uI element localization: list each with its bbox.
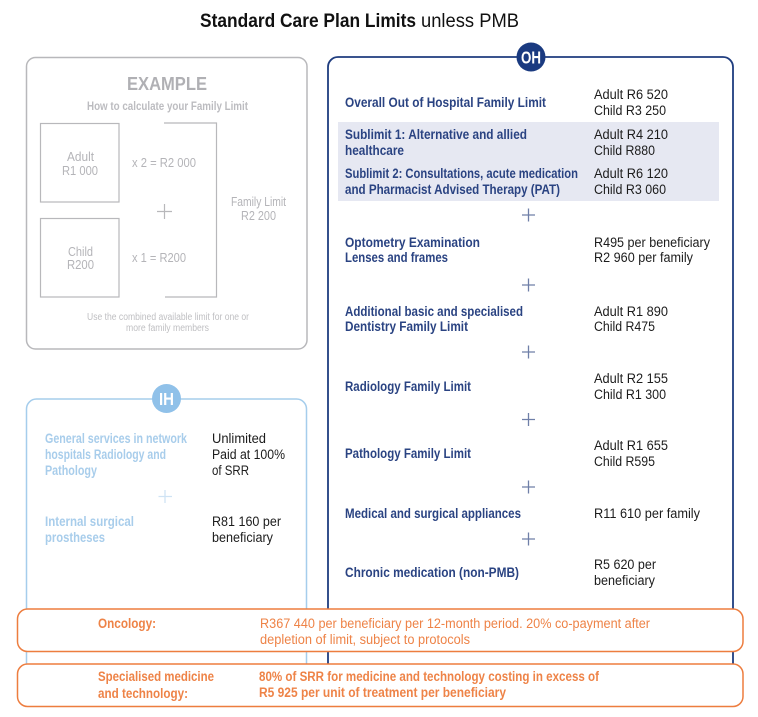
general services label [45, 431, 187, 478]
adult box: Adult [67, 150, 94, 164]
adult multiplication: x 2 = R2 000 [132, 156, 196, 170]
plus icon [522, 413, 535, 426]
panel: out of hospital [328, 42, 733, 664]
family limit result: R2 200 [241, 209, 276, 223]
row: sublimit 1: Sublimit 1: Alternative and allied [345, 127, 527, 142]
family limit result: Family Limit [231, 195, 286, 209]
callout: oncology [18, 609, 743, 652]
prostheses label: Internal surgical [45, 514, 134, 529]
example heading: EXAMPLE [127, 73, 207, 94]
panel: in hospital [26, 384, 306, 664]
panel: example [26, 58, 307, 349]
row: appliances: Medical and surgical appliances [345, 506, 521, 521]
prostheses label [45, 514, 134, 545]
general services value: Unlimited [212, 431, 266, 446]
row: dentistry: Dentistry Family Limit [345, 319, 468, 334]
row: radiology: Adult R2 155 [594, 371, 668, 386]
row: chronic medication [345, 557, 656, 588]
row: chronic medication: beneficiary [594, 573, 655, 588]
row: appliances: R11 610 per family [594, 506, 700, 521]
plus icon [522, 278, 535, 292]
bracket [164, 123, 216, 297]
row: optometry [345, 235, 710, 265]
callout: specialised medicine: and technology: [98, 686, 188, 701]
general services value [212, 431, 285, 478]
row: radiology: Radiology Family Limit [345, 379, 471, 394]
child box: R200 [67, 258, 94, 272]
row: pathology: Pathology Family Limit [345, 446, 471, 461]
title: Standard Care Plan Limits [200, 10, 416, 32]
row: pathology: Adult R1 655 [594, 438, 668, 453]
prostheses value: beneficiary [212, 530, 273, 545]
prostheses value: R81 160 per [212, 514, 281, 529]
example note: Use the combined available limit for one or [87, 312, 250, 323]
child box: Child [68, 245, 93, 259]
plus icon [157, 204, 172, 219]
row: dentistry: Adult R1 890 [594, 304, 668, 319]
general services label: hospitals Radiology and [45, 447, 166, 462]
row: chronic medication: Chronic medication (non-PMB) [345, 565, 519, 580]
row: sublimit 1: healthcare [345, 143, 404, 158]
example subheading: How to calculate your Family Limit [87, 101, 248, 113]
callout: specialised medicine [18, 664, 743, 706]
adult box [40, 124, 119, 202]
badge: OH: OH [521, 48, 541, 68]
plus icon [522, 532, 535, 546]
row: sublimit 1: Child R880 [594, 143, 655, 158]
row: optometry: R495 per beneficiary [594, 235, 710, 250]
row: sublimit 2: and Pharmacist Advised Therapy (PAT) [345, 182, 560, 197]
row: optometry: Lenses and frames [345, 250, 448, 265]
row: overall limit: Overall Out of Hospital Family Limit [345, 95, 546, 110]
row: dentistry: Additional basic and specialised [345, 304, 523, 319]
row: sublimit 2: Adult R6 120 [594, 166, 668, 181]
row: radiology [345, 371, 668, 402]
callout: specialised medicine: R5 925 per unit of treatment per beneficiary [259, 685, 506, 700]
callout: oncology: R367 440 per beneficiary per 12-month period. 20% co-payment after [260, 616, 650, 631]
row: pathology [345, 438, 668, 469]
row: optometry: Optometry Examination [345, 235, 480, 250]
general services value: of SRR [212, 463, 249, 478]
badge: OH [516, 42, 546, 72]
plus icon [522, 480, 535, 494]
row: optometry: R2 960 per family [594, 250, 693, 265]
row: overall limit: Child R3 250 [594, 103, 666, 118]
example note: more family members [126, 323, 209, 334]
example note [87, 312, 250, 334]
row: sublimit 2: Sublimit 2: Consultations, acute medication [345, 166, 578, 181]
row: sublimit 2: Child R3 060 [594, 182, 666, 197]
title: unless PMB [421, 10, 519, 32]
adult box: R1 000 [62, 164, 98, 178]
prostheses label: prostheses [45, 530, 105, 545]
plus icon [522, 208, 535, 222]
plus icon [158, 490, 172, 503]
row: pathology: Child R595 [594, 454, 655, 469]
row: dentistry: Child R475 [594, 319, 655, 334]
general services label: Pathology [45, 463, 97, 478]
sublimit shading [338, 122, 719, 201]
general services label: General services in network [45, 431, 187, 446]
row: sublimit 1: Adult R4 210 [594, 127, 668, 142]
badge: IH: IH [159, 389, 174, 409]
row: overall limit [345, 87, 668, 118]
row: appliances [345, 506, 700, 521]
child box [40, 218, 119, 297]
row: chronic medication: R5 620 per [594, 557, 656, 572]
row: radiology: Child R1 300 [594, 387, 666, 402]
family limit result [231, 195, 286, 223]
callout: oncology: Oncology: [98, 616, 156, 631]
badge: IH [152, 384, 181, 413]
callout: specialised medicine: Specialised medicine [98, 669, 214, 684]
plus icon [522, 346, 535, 358]
general services value: Paid at 100% [212, 447, 285, 462]
row: sublimit 1 [345, 127, 668, 158]
row: dentistry [345, 304, 668, 334]
callout: specialised medicine: 80% of SRR for medicine and technology costing in excess of [259, 669, 599, 684]
child multiplication: x 1 = R200 [132, 251, 186, 265]
row: overall limit: Adult R6 520 [594, 87, 668, 102]
callout: oncology: depletion of limit, subject to protocols [260, 632, 470, 647]
row: sublimit 2 [345, 166, 668, 197]
prostheses value [212, 514, 281, 545]
